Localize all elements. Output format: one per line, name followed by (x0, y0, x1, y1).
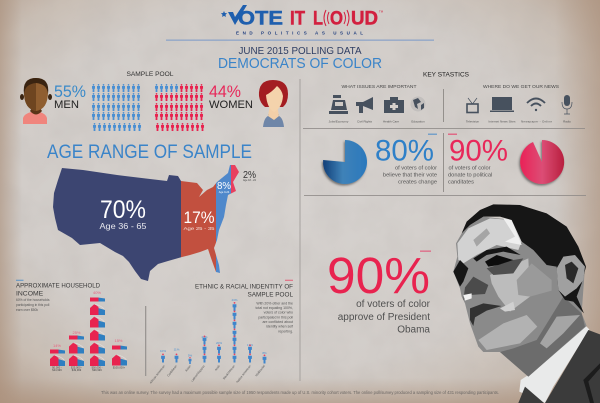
icon labels: issues: Civil Rights (357, 120, 372, 124)
caption (338, 299, 431, 336)
caption: creates change (398, 180, 437, 186)
chart: income pictogram: 15% (114, 338, 123, 343)
caption: donate to political (448, 172, 492, 178)
text: household note: 60% of the households (16, 298, 50, 302)
stat: 44% women (209, 83, 253, 111)
chart: ethnicity pictogram: Black/African (222, 364, 236, 380)
stat: 44% women: 44% (209, 83, 241, 101)
text: ethnic note: participated in this poll (258, 315, 293, 319)
heading: age range of sample: AGE RANGE OF SAMPLE (47, 141, 252, 163)
panel: sample pool (20, 71, 288, 131)
icon labels: news: Television (466, 120, 479, 124)
chart: income pictogram: $49,999 (72, 368, 82, 372)
chart: ethnicity pictogram: 20% (201, 335, 208, 339)
heading: household income (16, 282, 100, 298)
chart: income pictogram: $0,000 - (52, 366, 62, 370)
chart: ethnicity pictogram: Arab (214, 364, 221, 372)
heading: what issues are important: WHAT ISSUES ARE IMPORTANT (342, 84, 417, 89)
chart: ethnicity pictogram: 8% (262, 351, 267, 355)
stat: 80% change (323, 134, 437, 186)
text: ethnic note: With 20% other and the (256, 302, 293, 306)
icon: woman (259, 80, 288, 127)
caption: canditates (448, 180, 474, 186)
icon labels: news: Internet News Sites (488, 120, 516, 124)
dividers (300, 79, 586, 381)
pie: 80% (323, 140, 367, 184)
chart: ethnicity pictogram: 17% (247, 343, 253, 347)
icon labels: issues: Education (411, 120, 425, 124)
logo: Vote It Loud: O (330, 8, 343, 30)
caption: of voters of color (395, 166, 437, 172)
icon: man (20, 78, 52, 124)
accent dash (420, 250, 431, 252)
icon labels: issues: Jobs/Economy (329, 120, 349, 124)
chart: income pictogram: $25,000 - (71, 366, 82, 370)
chart: income pictogram: $24,999 (52, 368, 62, 372)
footnote: This was an online survey. The survey had a maximum possible sample size of 1950 respondents made up of U.S. minority cohort voters. The online poll/survey produced a sampling size of 431 responding participants. (101, 390, 499, 396)
panel: ethnic and racial identity (149, 280, 293, 384)
icon: cash register (329, 95, 348, 114)
heading: ethnic identity: ETHNIC & RACIAL INDENTITY OF (195, 284, 293, 290)
label: 8%: Age 0-24 (219, 190, 230, 194)
icon labels: news: Newspaper - Online (521, 120, 552, 124)
number: 90%: 90% (449, 134, 508, 168)
caption: believe that their vote (383, 172, 437, 178)
stat: 90% approve of Obama (327, 247, 431, 336)
label: 70%: Age 36 - 65 (100, 222, 147, 231)
icon labels: issues (329, 120, 425, 124)
icon: microphone (562, 95, 572, 114)
heading: key stastics: KEY STASTICS (423, 72, 470, 78)
icon labels: news (466, 120, 571, 124)
label: 17%: Age 25 - 35 (184, 226, 215, 231)
pie: 90% (520, 140, 564, 184)
icon labels: issues: Health Care (383, 120, 399, 124)
logo: Vote It Loud: END POLITICS AS USUAL (236, 30, 363, 36)
stat: 55% men (54, 83, 86, 111)
chart: ethnicity pictogram: 10% (160, 349, 166, 353)
stat: 44% women: WOMEN (209, 99, 253, 111)
label: 2%: 2% (243, 170, 256, 181)
US map choropleth (53, 165, 239, 281)
map: age range of sample (40, 141, 257, 285)
icon: first aid kit (384, 97, 404, 113)
label: 8%: 8% (217, 181, 231, 192)
stat: 55% men: 55% (54, 83, 86, 101)
text: ethnic note: identity when self (266, 325, 293, 329)
chart: income pictogram (50, 290, 127, 372)
caption: of voters of color (356, 299, 431, 310)
logo: Vote It Loud: L (313, 8, 323, 30)
logo: Vote It Loud (221, 5, 384, 36)
divider: panel separator (145, 306, 146, 376)
chart: ethnicity pictogram: Asian (184, 364, 192, 373)
chart: ethnicity pictogram: Native American (235, 364, 252, 384)
accent dash (16, 279, 24, 282)
stat: 90% donate (448, 134, 564, 186)
text: household note: earn over $50k (16, 308, 38, 312)
chart: ethnicity pictogram: Caribbean (166, 364, 178, 378)
heading: ethnic identity (195, 284, 293, 298)
label: 17%: 17% (184, 208, 214, 227)
number: 90%: 90% (327, 247, 430, 304)
accent dash (428, 133, 437, 136)
chart: income pictogram: $99,999 (92, 368, 102, 372)
caption (383, 166, 437, 186)
title rule (166, 40, 434, 41)
chart: ethnicity pictogram: Multiracial (254, 364, 266, 377)
icon: globe (410, 96, 426, 112)
chart: ethnicity pictogram: 43% (231, 298, 238, 302)
text: household note: participating in this poll (16, 303, 50, 307)
heading: June 2015 polling data: JUNE 2015 POLLING DATA (238, 45, 362, 57)
heading: ethnic identity: SAMPLE POOL (248, 292, 293, 298)
heading: sample pool: SAMPLE POOL (126, 71, 174, 78)
logo: Vote It Loud: TM (379, 10, 384, 14)
text: ethnic note: are conflicted about (262, 320, 293, 324)
number: 80%: 80% (375, 134, 434, 168)
heading: Democrats of Color: DEMOCRATS OF COLOR (218, 55, 382, 72)
label: 70%: 70% (100, 196, 146, 224)
heading: household income: INCOME (16, 290, 44, 298)
chart: income pictogram: 40% (93, 290, 101, 295)
pictogram: women (155, 84, 204, 131)
chart: ethnicity pictogram: 5% (188, 354, 192, 358)
heading: where do we get our news: WHERE DO WE GET OUR NEWS (483, 84, 559, 89)
logo: Vote It Loud: UD (351, 8, 378, 30)
caption (448, 166, 492, 186)
panel: household income (16, 280, 127, 372)
chart: ethnicity pictogram (149, 298, 267, 384)
chart: income pictogram: 14% (53, 343, 61, 348)
chart: ethnicity pictogram: Latino/Hispanic (190, 364, 206, 383)
stat: 55% men: MEN (54, 99, 79, 111)
chart: ethnicity pictogram: 11% (174, 348, 180, 352)
icon: wifi (527, 98, 545, 111)
chart: ethnicity pictogram: 20% (216, 341, 222, 345)
chart: ethnicity pictogram: African American (149, 364, 166, 384)
chart: income pictogram: 25% (72, 330, 81, 335)
icon: television (467, 98, 478, 112)
text: ethnic note (255, 302, 293, 334)
pictogram: men (92, 84, 141, 131)
caption: Obama (397, 324, 430, 336)
panel: key statistics (329, 72, 572, 124)
text: household note (16, 298, 50, 312)
accent dash (448, 133, 457, 136)
logo: Vote It Loud: IT (290, 8, 305, 30)
icon labels: news: Radio (563, 120, 571, 124)
icon: megaphone (356, 97, 373, 113)
text: ethnic note: reporting. (278, 330, 293, 334)
text: ethnic note: voters of color who (264, 311, 293, 315)
portrait: President Obama (453, 204, 600, 403)
label: 2%: Age 18 - 24 (243, 179, 257, 182)
icon: laptop (490, 97, 514, 112)
caption: approve of President (338, 312, 430, 323)
logo: Vote It Loud: OTE (238, 8, 283, 30)
accent dash (285, 279, 293, 282)
chart: income pictogram: $100,000+ (113, 366, 126, 370)
chart: income pictogram: $50,000 - (92, 366, 103, 370)
heading: household income: APPROXIMATE HOUSEHOLD (16, 282, 100, 290)
text: ethnic note: total not equaling 100%, (255, 306, 293, 310)
caption: of voters of color (448, 166, 491, 172)
